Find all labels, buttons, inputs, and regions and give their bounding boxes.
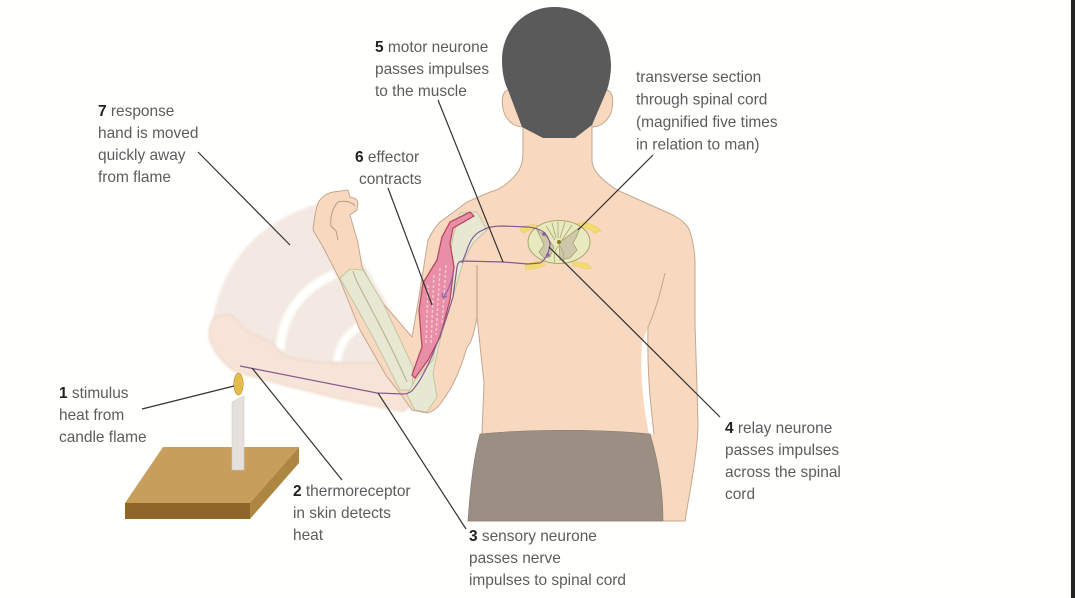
muscle bbox=[412, 212, 474, 378]
label 4 relay neurone: 4 relay neurone bbox=[725, 420, 832, 437]
gap between torso and right arm bbox=[641, 327, 654, 434]
faded lowered arm bbox=[209, 315, 410, 411]
label transverse section: in relation to man) bbox=[636, 136, 760, 154]
label 2 thermoreceptor: in skin detects bbox=[293, 505, 391, 522]
label 4 relay neurone: across the spinal bbox=[725, 464, 841, 481]
torso and raised arm bbox=[313, 120, 698, 521]
label 7 response: hand is moved bbox=[98, 125, 198, 142]
label 4 relay neurone: cord bbox=[725, 486, 755, 503]
label 2 thermoreceptor: 2 thermoreceptor bbox=[293, 483, 411, 500]
man body bbox=[313, 90, 698, 521]
label 3 sensory neurone: 3 sensory neurone bbox=[469, 528, 597, 545]
fist finger lines bbox=[331, 201, 355, 240]
label 3 sensory neurone: impulses to spinal cord bbox=[469, 572, 626, 589]
candle holder board bbox=[125, 447, 299, 519]
label 5 motor neurone: 5 motor neurone bbox=[375, 39, 488, 56]
label 5 motor neurone: passes impulses bbox=[375, 61, 489, 78]
label transverse section: (magnified five times bbox=[636, 114, 778, 131]
faded arm movement arc bbox=[213, 203, 412, 375]
label 7 response: 7 response bbox=[98, 103, 174, 120]
label 7 response: from flame bbox=[98, 169, 171, 186]
label 6 effector: contracts bbox=[359, 171, 422, 188]
label 5 motor neurone: to the muscle bbox=[375, 83, 467, 100]
label 1 stimulus: 1 stimulus bbox=[59, 385, 128, 402]
candle bbox=[232, 373, 244, 470]
ears bbox=[502, 90, 613, 127]
label 1 stimulus: candle flame bbox=[59, 429, 147, 446]
arm bones bbox=[340, 212, 487, 412]
label transverse section: through spinal cord bbox=[636, 92, 767, 108]
sensory neurone path bbox=[240, 226, 550, 394]
head hair bbox=[502, 7, 611, 138]
label transverse section: transverse section bbox=[636, 69, 761, 86]
label 4 relay neurone: passes impulses bbox=[725, 442, 839, 459]
label 6 effector: 6 effector bbox=[355, 149, 419, 166]
label 7 response: quickly away bbox=[98, 147, 186, 164]
label 3 sensory neurone: passes nerve bbox=[469, 550, 561, 567]
trousers bbox=[468, 430, 663, 521]
spinal cord section bbox=[520, 220, 601, 269]
leader lines bbox=[142, 100, 720, 529]
label 2 thermoreceptor: heat bbox=[293, 527, 324, 544]
label 1 stimulus: heat from bbox=[59, 407, 124, 424]
